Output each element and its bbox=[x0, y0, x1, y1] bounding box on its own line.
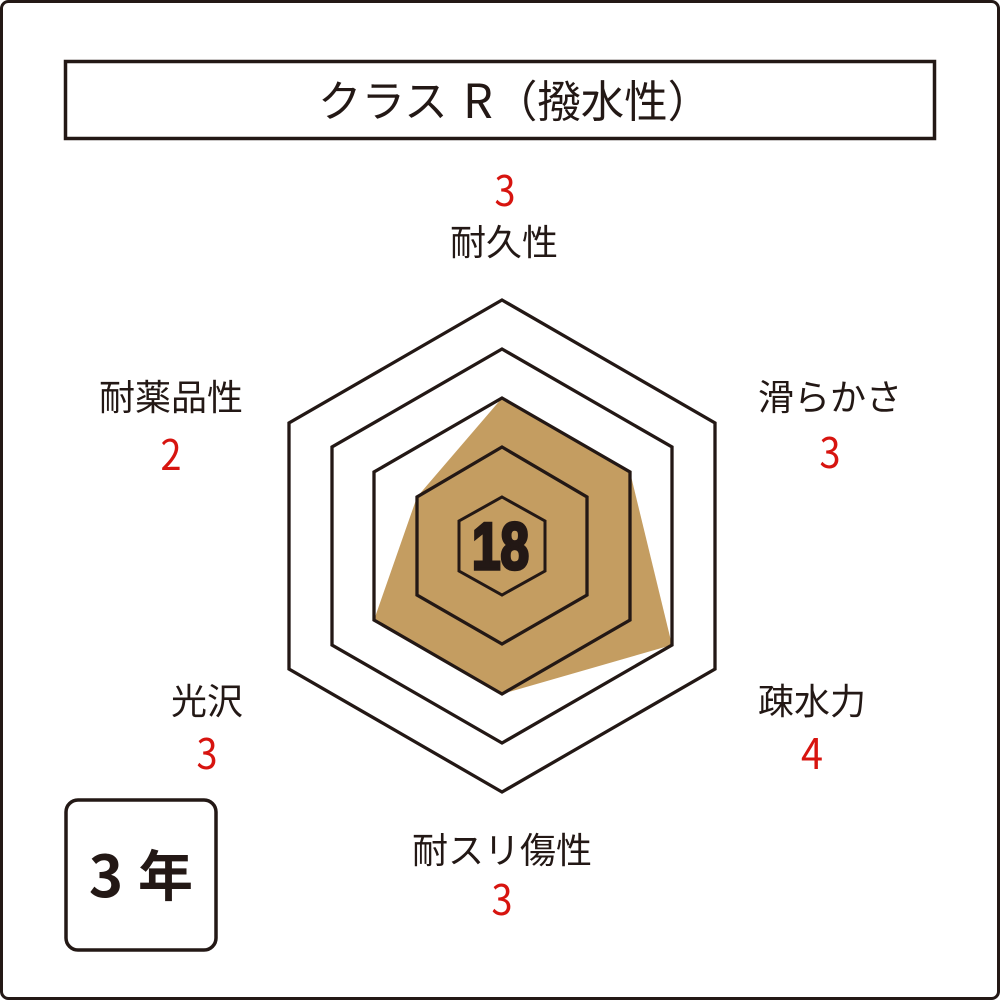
axis: gloss: 3 bbox=[196, 721, 218, 782]
axis: durability bbox=[450, 158, 558, 263]
axis: water repellency: 4 bbox=[801, 721, 823, 782]
axis: water repellency bbox=[758, 681, 866, 782]
center score bbox=[459, 497, 545, 595]
axis: scratch resistance bbox=[412, 830, 592, 928]
axis: chemical resistance: 2 bbox=[160, 422, 182, 483]
axis: water repellency: 疎水力 bbox=[758, 681, 866, 722]
title: （撥水性） bbox=[494, 66, 711, 130]
badge: 3 years: 3 bbox=[89, 830, 123, 914]
axis: smoothness bbox=[758, 377, 902, 481]
axis: gloss: 光沢 bbox=[171, 681, 243, 722]
center score: 18 bbox=[472, 509, 529, 583]
axis: chemical resistance bbox=[99, 377, 243, 483]
axis: smoothness: 滑らかさ bbox=[758, 377, 902, 418]
title bbox=[66, 62, 934, 138]
axis: chemical resistance: 耐薬品性 bbox=[99, 377, 243, 418]
axis: durability: 耐久性 bbox=[450, 222, 558, 263]
axis: scratch resistance: 耐スリ傷性 bbox=[412, 830, 592, 871]
axis: gloss bbox=[171, 681, 243, 782]
radar chart bbox=[289, 300, 715, 792]
axis: scratch resistance: 3 bbox=[492, 867, 512, 928]
title: R bbox=[463, 63, 493, 132]
grid hexagons bbox=[289, 300, 715, 792]
axis: durability: 3 bbox=[494, 158, 516, 219]
badge: 3 years: 年 bbox=[138, 832, 193, 912]
title: クラス bbox=[318, 67, 448, 130]
axis: smoothness: 3 bbox=[820, 420, 840, 481]
badge: 3 years bbox=[66, 800, 216, 950]
filled data polygon bbox=[374, 398, 672, 694]
